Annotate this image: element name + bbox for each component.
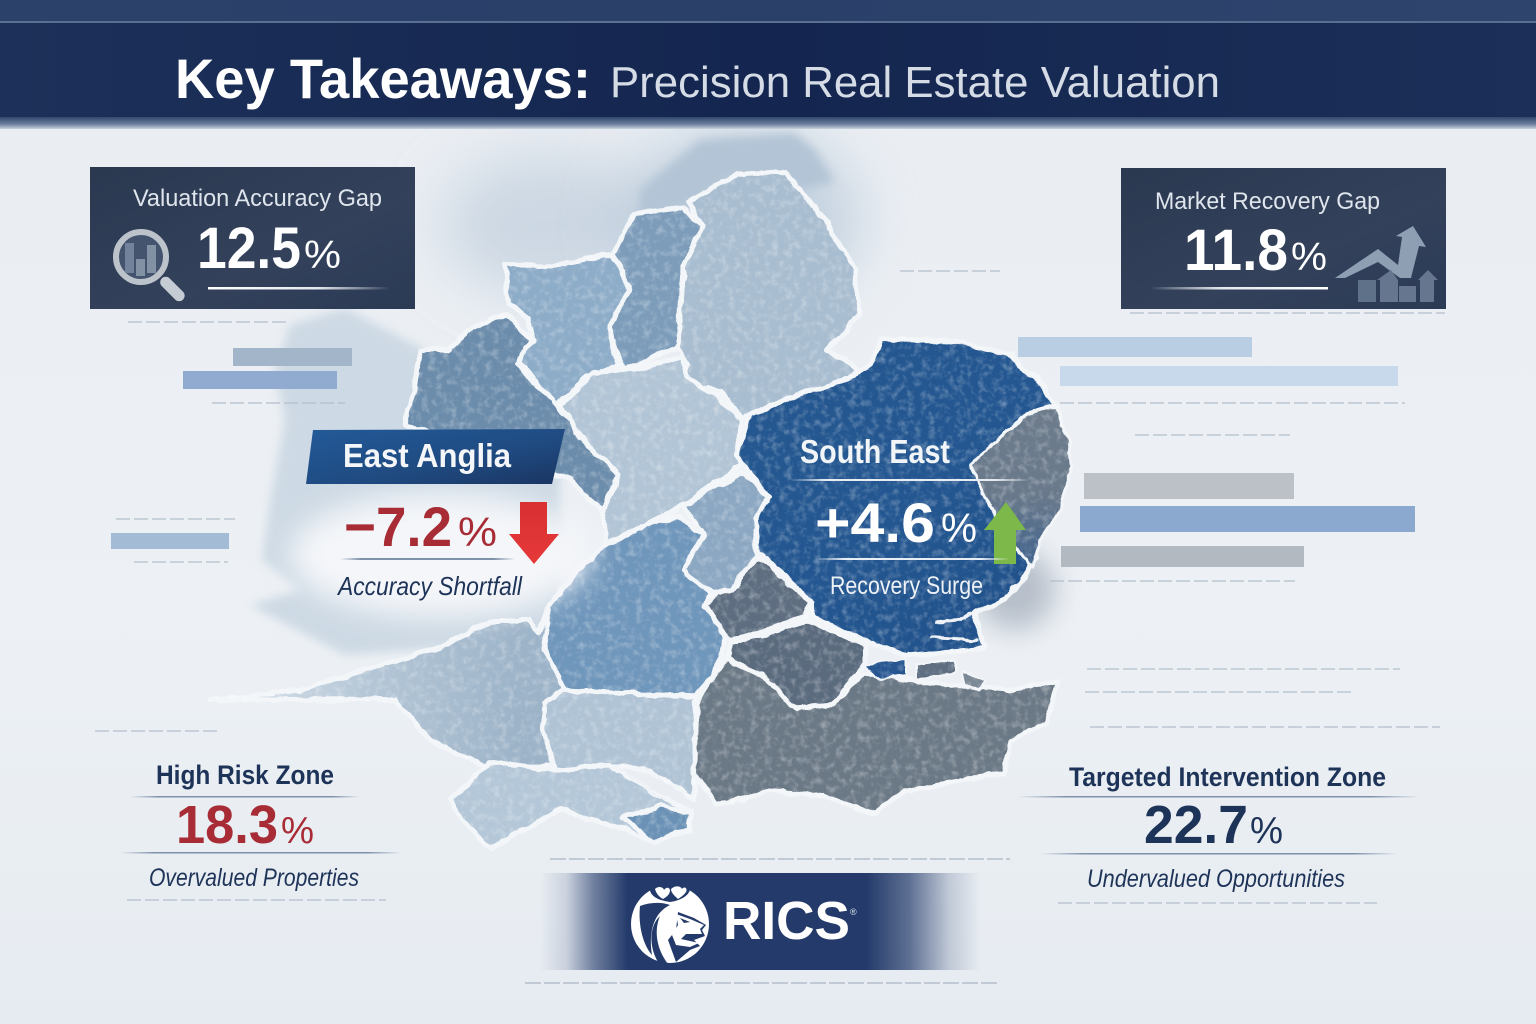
stat: 22.7%: % [1250, 810, 1283, 852]
region: south-west faded [210, 607, 565, 768]
panel: Valuation Accuracy Gap [90, 167, 415, 309]
stat: -7.2%: % [458, 509, 497, 555]
region: dark grey south [726, 621, 865, 708]
stat: 12.5%: % [304, 234, 341, 277]
region: eastern grey [970, 407, 1072, 568]
decorative bars right [900, 271, 1445, 727]
region: large south-east grey [694, 658, 1058, 814]
stat: 12.5%: 12.5 [197, 216, 301, 281]
caption: Accuracy Shortfall [336, 571, 523, 601]
caption: Recovery Surge [830, 572, 983, 600]
panel heading: Valuation Accuracy Gap [133, 185, 382, 212]
header band [0, 0, 1536, 129]
region: south coast blue patch [622, 806, 692, 842]
stat: 11.8%: 11.8 [1184, 218, 1288, 283]
region: north-west mid blue [506, 254, 630, 405]
white glow behind East Anglia stats [290, 493, 590, 617]
stat: 11.8%: % [1291, 236, 1327, 279]
panel: Market Recovery Gap [1121, 168, 1446, 309]
heading: South East [800, 433, 950, 470]
region: small central blue [683, 472, 769, 594]
RICS wordmark: RICS [723, 891, 850, 951]
stat: -7.2%: −7.2 [344, 495, 452, 558]
region: south coast pale [450, 762, 692, 848]
caption: Overvalued Properties [149, 864, 359, 892]
icon: green up arrow [984, 502, 1026, 564]
banner: East Anglia [306, 429, 565, 484]
stat block: High Risk Zone: High Risk Zone [156, 760, 334, 790]
panel heading: Market Recovery Gap [1155, 188, 1380, 215]
registered mark: ® [850, 907, 857, 917]
map of regions [210, 171, 1072, 848]
icon: rising chart arrow [1335, 226, 1438, 302]
stat: 18.3%: % [281, 810, 314, 852]
region: islands [865, 660, 985, 690]
region: midlands mid blue [544, 516, 726, 697]
stat: 22.7%: 22.7 [1144, 795, 1248, 855]
region: central pale [560, 357, 742, 543]
decorative bars left [95, 322, 352, 731]
callout: East Anglia [306, 429, 565, 601]
stat block: High Risk Zone [120, 760, 402, 900]
caption: Undervalued Opportunities [1087, 865, 1345, 893]
title: Key Takeaways: [175, 47, 591, 110]
stat: 18.3%: 18.3 [176, 795, 278, 855]
callout: South East [790, 433, 1030, 600]
title: Precision Real Estate Valuation [610, 58, 1220, 107]
stat: +4.6%: % [941, 505, 977, 551]
title [175, 47, 1220, 110]
coast inlets [620, 612, 978, 800]
banner: East Anglia: East Anglia [343, 437, 512, 474]
stat block: Targeted Intervention Zone: Targeted Intervention Zone [1069, 762, 1386, 792]
region: dark grey north [704, 557, 812, 640]
background haze behind map [250, 130, 1055, 655]
region: north-east pale [678, 171, 865, 419]
region: south pale [544, 690, 697, 800]
stat: +4.6%: +4.6 [815, 491, 935, 554]
icon: red down arrow [509, 502, 559, 564]
RICS logo band [525, 859, 1010, 983]
stat block: Targeted Intervention Zone [1017, 762, 1420, 903]
icon: magnifier with bars [116, 232, 187, 303]
region: South East blue [737, 339, 1056, 655]
icon: lion emblem [631, 885, 709, 964]
region: western darker blue [405, 314, 619, 511]
region: narrow central north [608, 208, 702, 371]
